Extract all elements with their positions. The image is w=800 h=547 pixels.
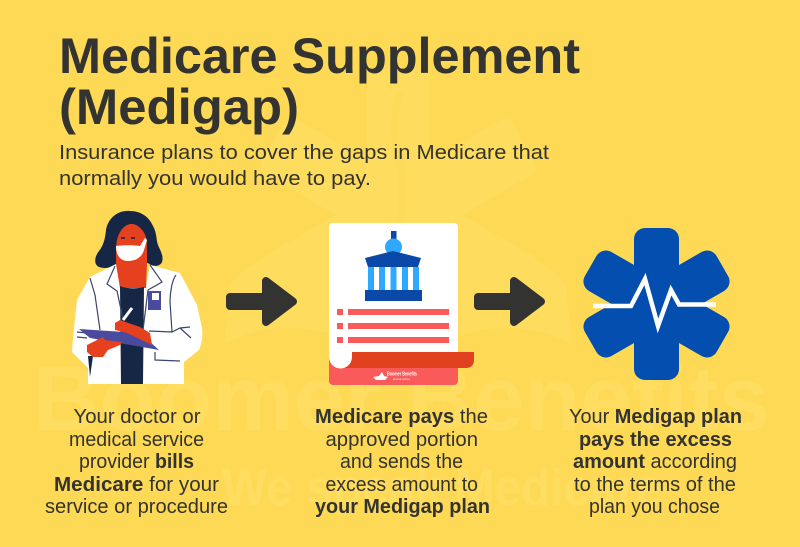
badge: [148, 291, 161, 310]
icon: medical star with heartbeat: [579, 228, 734, 380]
title: (Medigap): [59, 79, 299, 135]
text: step 1: Medicare for your: [54, 474, 219, 496]
text: step 3: to the terms of the: [574, 474, 736, 496]
arrow 2: [478, 281, 541, 322]
title: [59, 28, 580, 135]
text: step 3: [569, 406, 742, 518]
list lines: [337, 309, 449, 343]
text: step 1: [45, 406, 228, 518]
clipboard: [79, 329, 159, 350]
lab coat: [72, 264, 202, 384]
hands: [87, 320, 152, 357]
scroll brand mark: Boomer Benefits: [387, 372, 417, 378]
sleeve shadow: [88, 356, 93, 377]
coat creases: [77, 265, 191, 361]
pen: [123, 308, 132, 320]
text: step 2: Medicare pays the: [315, 406, 488, 428]
hair: [95, 211, 163, 268]
subtitle: [59, 141, 549, 190]
text: step 3: plan you chose: [589, 496, 720, 518]
text: step 2: approved portion: [326, 429, 478, 451]
shirt: [120, 286, 144, 384]
watermark: logo and brand: We speak Medicare: [222, 459, 662, 517]
text: step 1: medical service: [69, 429, 204, 451]
watermark: logo and brand: Boomer Benefits: [33, 348, 770, 450]
text: step 1: service or procedure: [45, 496, 228, 518]
text: step 3: pays the excess: [579, 429, 732, 451]
subtitle: normally you would have to pay.: [59, 167, 371, 190]
scroll brand mark: [373, 372, 417, 381]
scroll brand mark: we speak medicare: [393, 377, 410, 381]
text: step 2: your Medigap plan: [315, 496, 490, 518]
icon: doctor illustration: [72, 211, 202, 384]
text: step 1: provider bills: [79, 451, 194, 473]
eyes: [121, 237, 135, 239]
title: Medicare Supplement: [59, 28, 580, 84]
arrow 1: [230, 281, 293, 322]
icon: capitol building: [365, 231, 422, 301]
text: step 3: Your Medigap plan: [569, 406, 742, 428]
text: step 2: [315, 406, 490, 518]
mask: [116, 238, 147, 261]
text: step 2: and sends the: [340, 451, 463, 473]
text: step 2: excess amount to: [326, 474, 478, 496]
text: step 3: amount according: [573, 451, 737, 473]
text: step 1: Your doctor or: [74, 406, 201, 428]
watermark: logo and brand: [33, 70, 770, 517]
face and chest: [116, 224, 147, 288]
icon: government document scroll: [329, 223, 474, 385]
subtitle: Insurance plans to cover the gaps in Medicare that: [59, 141, 549, 164]
